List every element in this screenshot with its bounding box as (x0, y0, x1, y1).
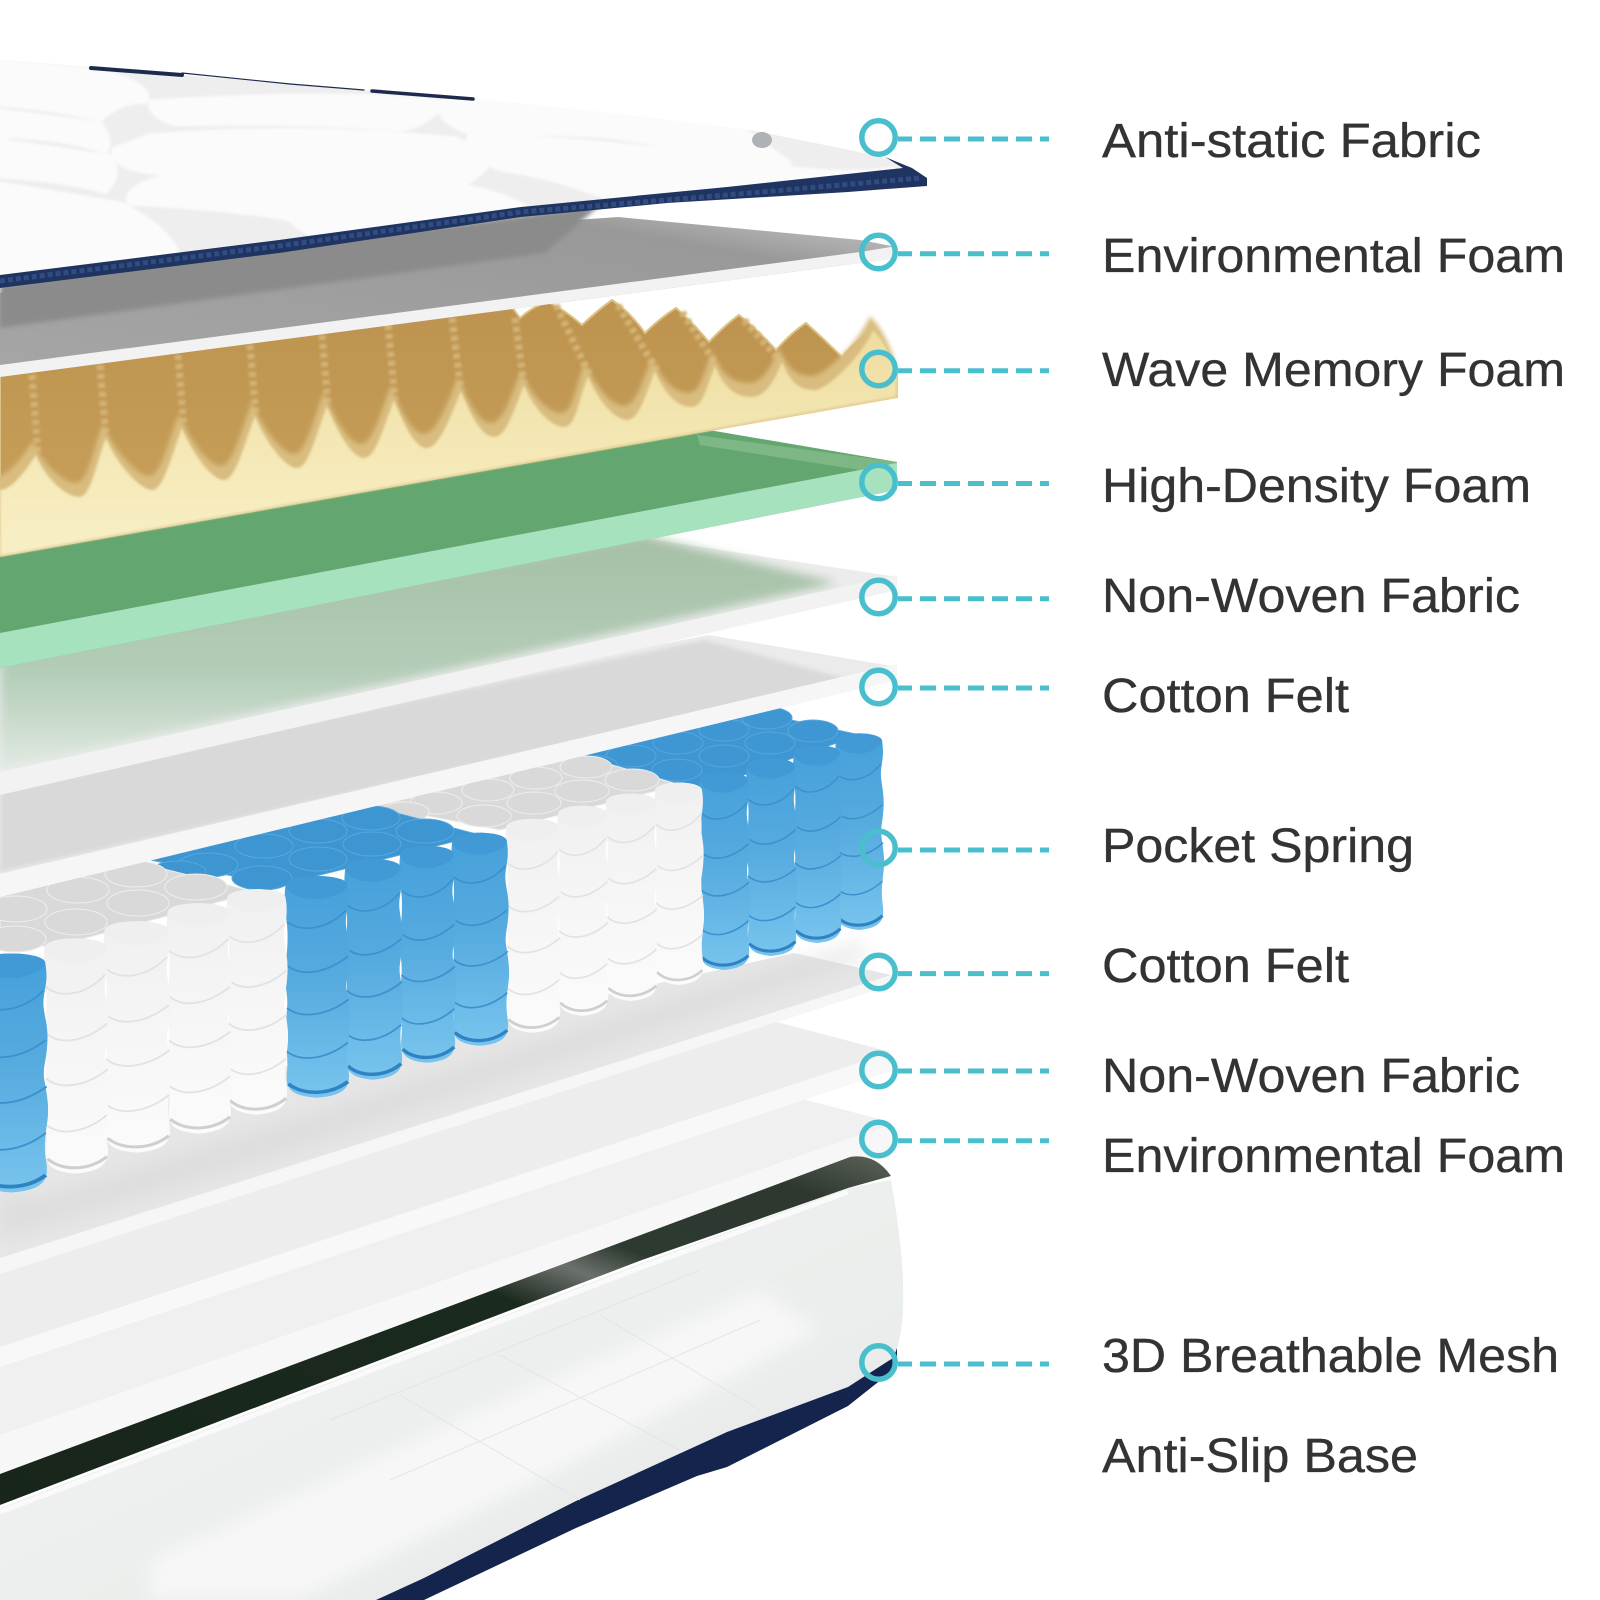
mesh side panel (0, 1180, 903, 1600)
foam shadow wedge (0, 205, 600, 328)
mesh grid lines (330, 1270, 760, 1500)
marker and dashed leader (862, 1053, 1049, 1087)
layer: cotton felt lower (0, 940, 891, 1274)
layer: wave memory foam (0, 300, 897, 556)
fabric shaded inner face (0, 535, 838, 770)
callout: Anti-static Fabric (862, 115, 1481, 168)
fabric top face (0, 538, 897, 793)
spring back rows middle white block (376, 756, 680, 830)
foam back peaks (0, 300, 897, 556)
foam front face (0, 246, 897, 377)
foam top face (0, 1096, 891, 1480)
felt shaded inner face (0, 640, 850, 872)
label: Anti-static Fabric (1102, 115, 1481, 168)
callout: Environmental Foam lower (862, 1122, 1565, 1183)
callout: 3D Breathable Mesh (862, 1330, 1559, 1383)
foam front face (0, 1124, 891, 1480)
quilted tufts (0, 62, 895, 290)
marker and dashed leader (862, 352, 1049, 386)
callout: Environmental Foam upper (862, 230, 1565, 283)
marker and dashed leader (862, 121, 1049, 154)
fabric back piping (91, 68, 473, 99)
fabric quilted surface (0, 60, 903, 278)
marker and dashed leader (862, 670, 1049, 704)
marker and dashed leader (862, 1346, 1049, 1379)
layer: anti-static fabric (0, 60, 927, 290)
felt front face (0, 664, 897, 897)
marker and dashed leader (862, 235, 1049, 269)
foam front scallops (0, 330, 897, 556)
marker and dashed leader (862, 831, 1049, 865)
label: Pocket Spring (1102, 820, 1414, 873)
label: Cotton Felt (1102, 670, 1349, 723)
callout: Non-Woven Fabric lower (862, 1050, 1520, 1103)
fabric front face (0, 575, 897, 795)
dark band between foam and mesh (0, 1156, 891, 1505)
callout: Cotton Felt upper (862, 670, 1349, 723)
foam mid scallops (0, 316, 894, 542)
spring shadow on felt (0, 940, 870, 1240)
mesh highlight (150, 1290, 820, 1600)
foam top face (0, 428, 897, 668)
layer: non-woven fabric lower (0, 1021, 891, 1367)
callout: Cotton Felt lower (862, 940, 1349, 993)
foam rim highlight (697, 435, 897, 470)
felt top face (0, 635, 897, 877)
label: Environmental Foam (1102, 230, 1565, 283)
callout: Wave Memory Foam (862, 344, 1565, 397)
callout: High-Density Foam (862, 460, 1531, 513)
label: Environmental Foam (1102, 1130, 1565, 1183)
label: Anti-Slip Base: Anti-Slip Base (1102, 1430, 1418, 1483)
fabric label mark (752, 132, 772, 148)
marker and dashed leader (862, 580, 1049, 614)
spring front row (0, 733, 884, 1193)
label: Cotton Felt (1102, 940, 1349, 993)
fabric navy edge band (0, 157, 927, 288)
label: 3D Breathable Mesh (1102, 1330, 1559, 1383)
fabric front face (0, 1052, 891, 1367)
layer: cotton felt upper (0, 635, 897, 897)
callout: Pocket Spring (862, 820, 1414, 873)
layer: non-woven fabric upper (0, 535, 897, 795)
label: Non-Woven Fabric (1102, 1050, 1520, 1103)
marker and dashed leader (862, 465, 1049, 499)
spring back rows left white block (0, 861, 256, 952)
layer: pocket springs (0, 707, 884, 1193)
spring back rows middle blue block (150, 806, 480, 890)
label: High-Density Foam (1102, 460, 1531, 513)
callout: Non-Woven Fabric upper (862, 570, 1520, 623)
layer: environmental foam upper (0, 205, 897, 377)
spring back rows right blue block (574, 707, 860, 790)
label: Non-Woven Fabric (1102, 570, 1520, 623)
marker and dashed leader (862, 1122, 1049, 1156)
layer: anti-slip base and 3D breathable mesh (0, 1180, 903, 1600)
layer: environmental foam lower (0, 1096, 891, 1480)
label: Wave Memory Foam (1102, 344, 1565, 397)
fabric top face (0, 1021, 891, 1367)
marker and dashed leader (862, 955, 1049, 989)
mesh top piping (0, 1192, 848, 1512)
foam ridge highlights (32, 305, 782, 455)
foam top face (0, 217, 897, 377)
foam front face (0, 463, 897, 668)
felt front face (0, 975, 891, 1274)
edge band weave (0, 178, 920, 281)
anti-slip base navy edge (370, 1345, 897, 1600)
layer: high-density foam (0, 428, 897, 668)
felt top face (0, 953, 891, 1274)
